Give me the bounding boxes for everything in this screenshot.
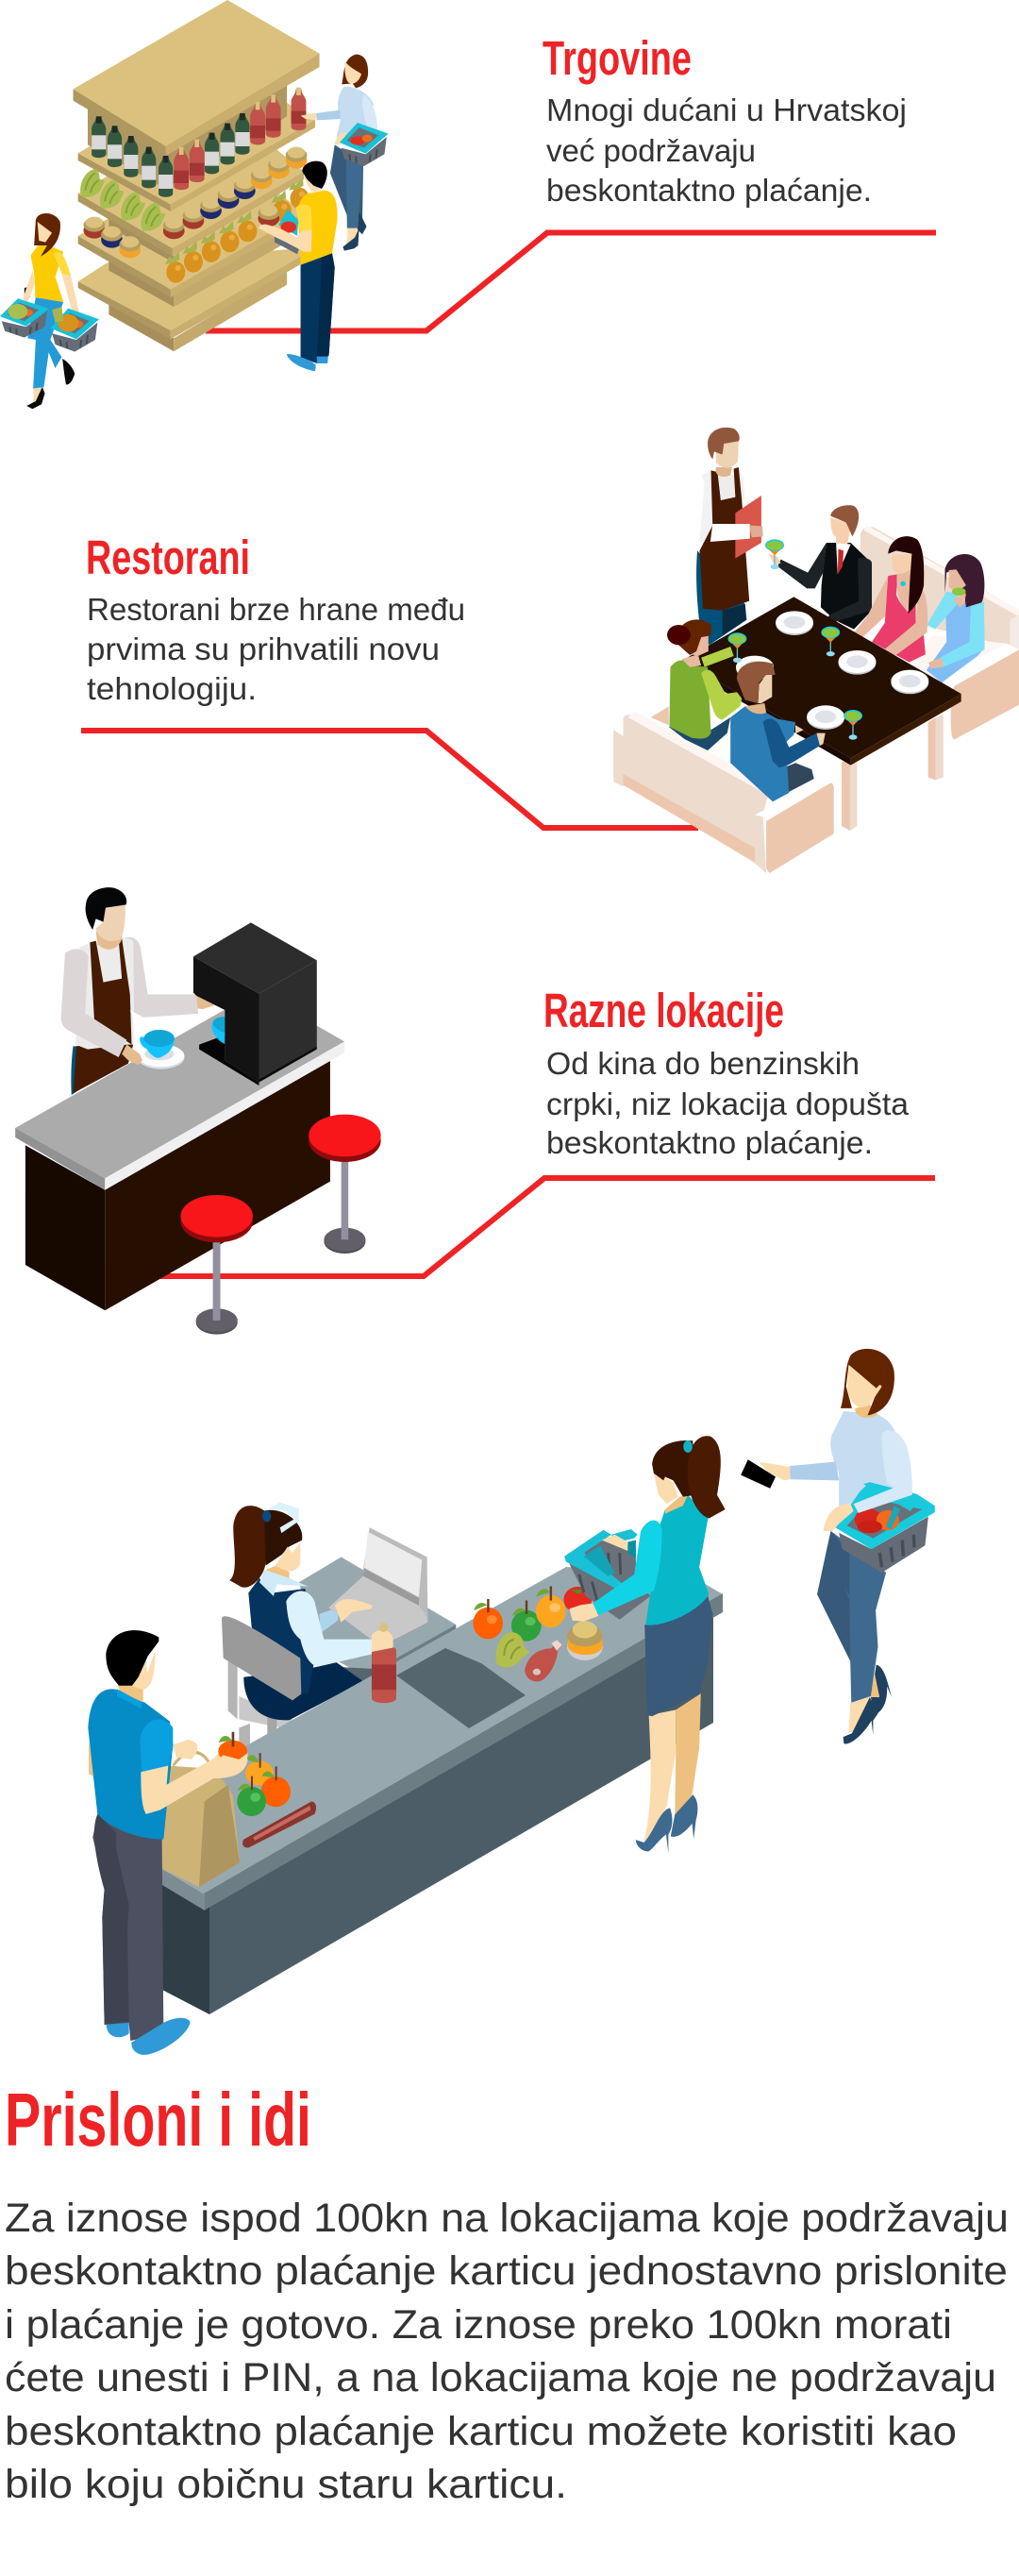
text block: Prisloni i idi: beskontaktno plaćanje karticu jednostavno prislonite	[5, 2248, 1008, 2294]
text block: Razne lokacije	[546, 1046, 910, 1160]
stool front	[180, 1195, 253, 1335]
payment basket	[835, 1482, 935, 1573]
table legs	[842, 715, 944, 831]
woman at counter	[569, 1436, 726, 1853]
woman at back	[301, 55, 389, 251]
chair	[228, 1645, 292, 1749]
illustration: coffee bar	[15, 887, 381, 1335]
cashier's desk and cashier	[222, 1503, 456, 1749]
woman in pink	[841, 536, 927, 663]
counter goods and two women	[473, 1349, 935, 1853]
sauce bottle	[372, 1623, 396, 1703]
cup and saucer	[137, 1030, 185, 1069]
panel: Prisloni i idi	[5, 2078, 1009, 2507]
man in suit	[769, 505, 872, 630]
jars and produce	[80, 147, 309, 283]
text block: Restorani: Restorani brze hrane među	[87, 592, 465, 627]
shelf unit	[73, 0, 320, 351]
customer in blue shirt	[88, 1630, 248, 2055]
hand over saucer	[122, 1045, 142, 1065]
produce on counter	[473, 1587, 603, 1682]
connector line: Razne lokacije	[160, 1178, 935, 1276]
items and customer with bag	[88, 1623, 396, 2055]
table	[682, 597, 961, 766]
woman with two baskets	[0, 213, 99, 409]
heading: Razne lokacije: Razne lokacije	[543, 984, 784, 1037]
heading: Prisloni i idi: Prisloni i idi	[5, 2078, 311, 2162]
barista	[61, 887, 214, 1095]
text block: Restorani: tehnologiju.	[87, 671, 257, 706]
shopping bag	[162, 1752, 240, 1887]
connector line: Trgovine	[206, 232, 936, 330]
text block: Prisloni i idi: bilo koju običnu staru karticu.	[5, 2462, 567, 2507]
text block: Prisloni i idi: i plaćanje je gotovo. Za iznose preko 100kn morati	[5, 2302, 952, 2348]
left sofa	[613, 706, 834, 873]
text block: Prisloni i idi: Za iznose ispod 100kn na lokacijama koje podržavaju	[5, 2196, 1009, 2241]
woman in blue	[927, 554, 985, 682]
text block: Prisloni i idi: beskontaktno plaćanje karticu možete koristiti kao	[5, 2409, 957, 2454]
panel: Razne lokacije	[15, 887, 935, 1335]
man in blue	[730, 662, 826, 801]
counter	[15, 1008, 344, 1310]
right sofa	[860, 526, 1019, 739]
fruit pile	[237, 1753, 291, 1816]
text block: Restorani: prvima su prihvatili novu	[87, 631, 440, 666]
heading: Restorani: Restorani	[86, 530, 250, 584]
counter top and body	[162, 1567, 723, 2014]
chair back	[222, 1616, 301, 1700]
panel: Trgovine	[0, 0, 936, 409]
text block: Razne lokacije: beskontaktno plaćanje.	[546, 1125, 873, 1160]
laptop	[328, 1527, 427, 1640]
text block: Razne lokacije: Od kina do benzinskih	[546, 1046, 860, 1081]
sausage	[242, 1801, 316, 1848]
illustration: restaurant table	[613, 428, 1019, 873]
bottles	[92, 88, 306, 197]
text block: Prisloni i idi	[5, 2196, 1009, 2507]
waiter	[696, 428, 763, 645]
coffee machine	[193, 922, 317, 1086]
stool back	[309, 1115, 381, 1254]
text block: Razne lokacije: crpki, niz lokacija dopušta	[546, 1086, 910, 1121]
illustration: supermarket shelf and shoppers	[0, 0, 389, 409]
text block: Trgovine	[546, 93, 907, 208]
man with basket	[258, 161, 338, 371]
cashier	[229, 1503, 373, 1720]
text block: Restorani	[87, 592, 465, 706]
cocktail glasses	[727, 539, 862, 740]
text block: Prisloni i idi: ćete unesti i PIN, a na lokacijama koje ne podržavaju	[5, 2355, 996, 2400]
woman in green	[667, 619, 742, 750]
basket on counter	[564, 1529, 650, 1620]
text block: Trgovine: već podržavaju	[546, 133, 756, 168]
woman paying with phone	[741, 1349, 935, 1743]
text block: Trgovine: beskontaktno plaćanje.	[546, 173, 872, 208]
panel: Restorani	[81, 428, 1019, 873]
heading: Trgovine: Trgovine	[543, 31, 692, 85]
text block: Trgovine: Mnogi dućani u Hrvatskoj	[546, 93, 907, 127]
connector line: Restorani	[81, 731, 698, 828]
illustration: checkout counter with contactless payment	[88, 1349, 935, 2055]
